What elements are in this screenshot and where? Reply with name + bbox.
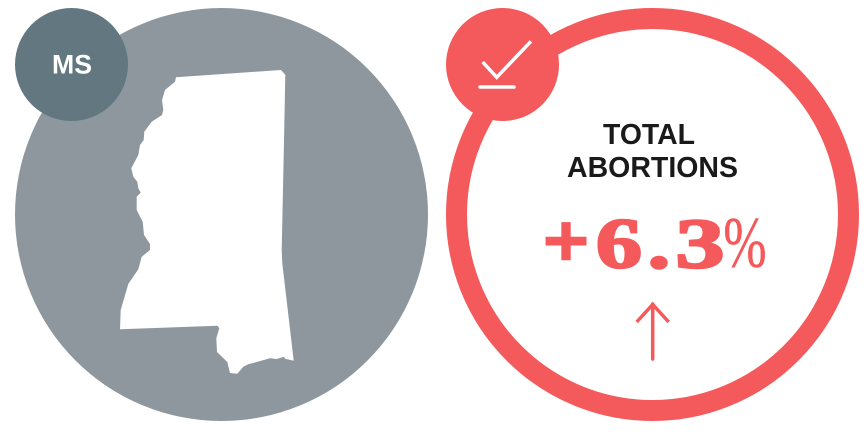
panel: state map [15,8,428,421]
map: Mississippi outline [120,70,294,374]
value: +6.3%: . [648,205,670,283]
badge: check icon [446,8,559,121]
heading: total abortions: TOTAL [603,119,695,151]
heading: total abortions [567,119,738,184]
gray state circle [15,8,428,421]
value: +6.3%: 6 [596,205,642,283]
value: +6.3% [543,200,767,283]
red ring [456,18,848,410]
value: +6.3%: + [543,200,589,282]
badge: state abbreviation: MS [52,50,92,80]
value: +6.3%: % [723,202,767,283]
arrow: up [637,304,669,359]
value: +6.3%: 3 [676,204,724,283]
heading: total abortions: ABORTIONS [567,152,738,184]
badge: state abbreviation [15,8,128,121]
panel: total abortions [446,8,848,410]
